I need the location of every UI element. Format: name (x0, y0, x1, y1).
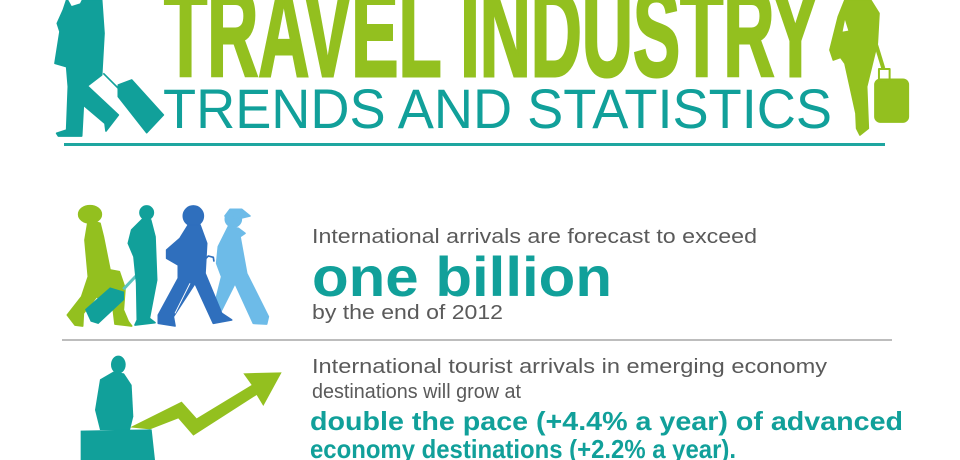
blue walker (158, 206, 232, 326)
icon: woman with suitcase (830, 0, 908, 135)
growth arrow (130, 372, 282, 436)
icon: group of four walking travellers (67, 206, 268, 326)
green woman (67, 206, 132, 326)
subtitle: trends and statistics: TRENDS AND STATISTICS (163, 77, 832, 140)
light blue walker (215, 209, 268, 324)
text block: emerging economy growth (310, 356, 903, 460)
text block: one billion forecast: one billion (312, 245, 612, 308)
teal suitcase (85, 276, 136, 324)
text block: emerging economy growth: International tourist arrivals in emerging economy (312, 356, 827, 378)
man silhouette (81, 356, 155, 460)
header rule (64, 143, 885, 146)
text block: emerging economy growth: double the pace (+4.4% a year) of advanced (310, 406, 903, 436)
icon: business traveller with growth arrow (81, 356, 282, 460)
teal man (128, 206, 157, 325)
text block: one billion forecast (312, 226, 757, 324)
text block: one billion forecast: by the end of 2012 (312, 302, 503, 324)
text block: emerging economy growth: destinations will grow at (312, 381, 521, 403)
text block: one billion forecast: International arrivals are forecast to exceed (312, 226, 757, 248)
section divider (62, 339, 892, 341)
icon: man with rolling suitcase (55, 0, 163, 136)
